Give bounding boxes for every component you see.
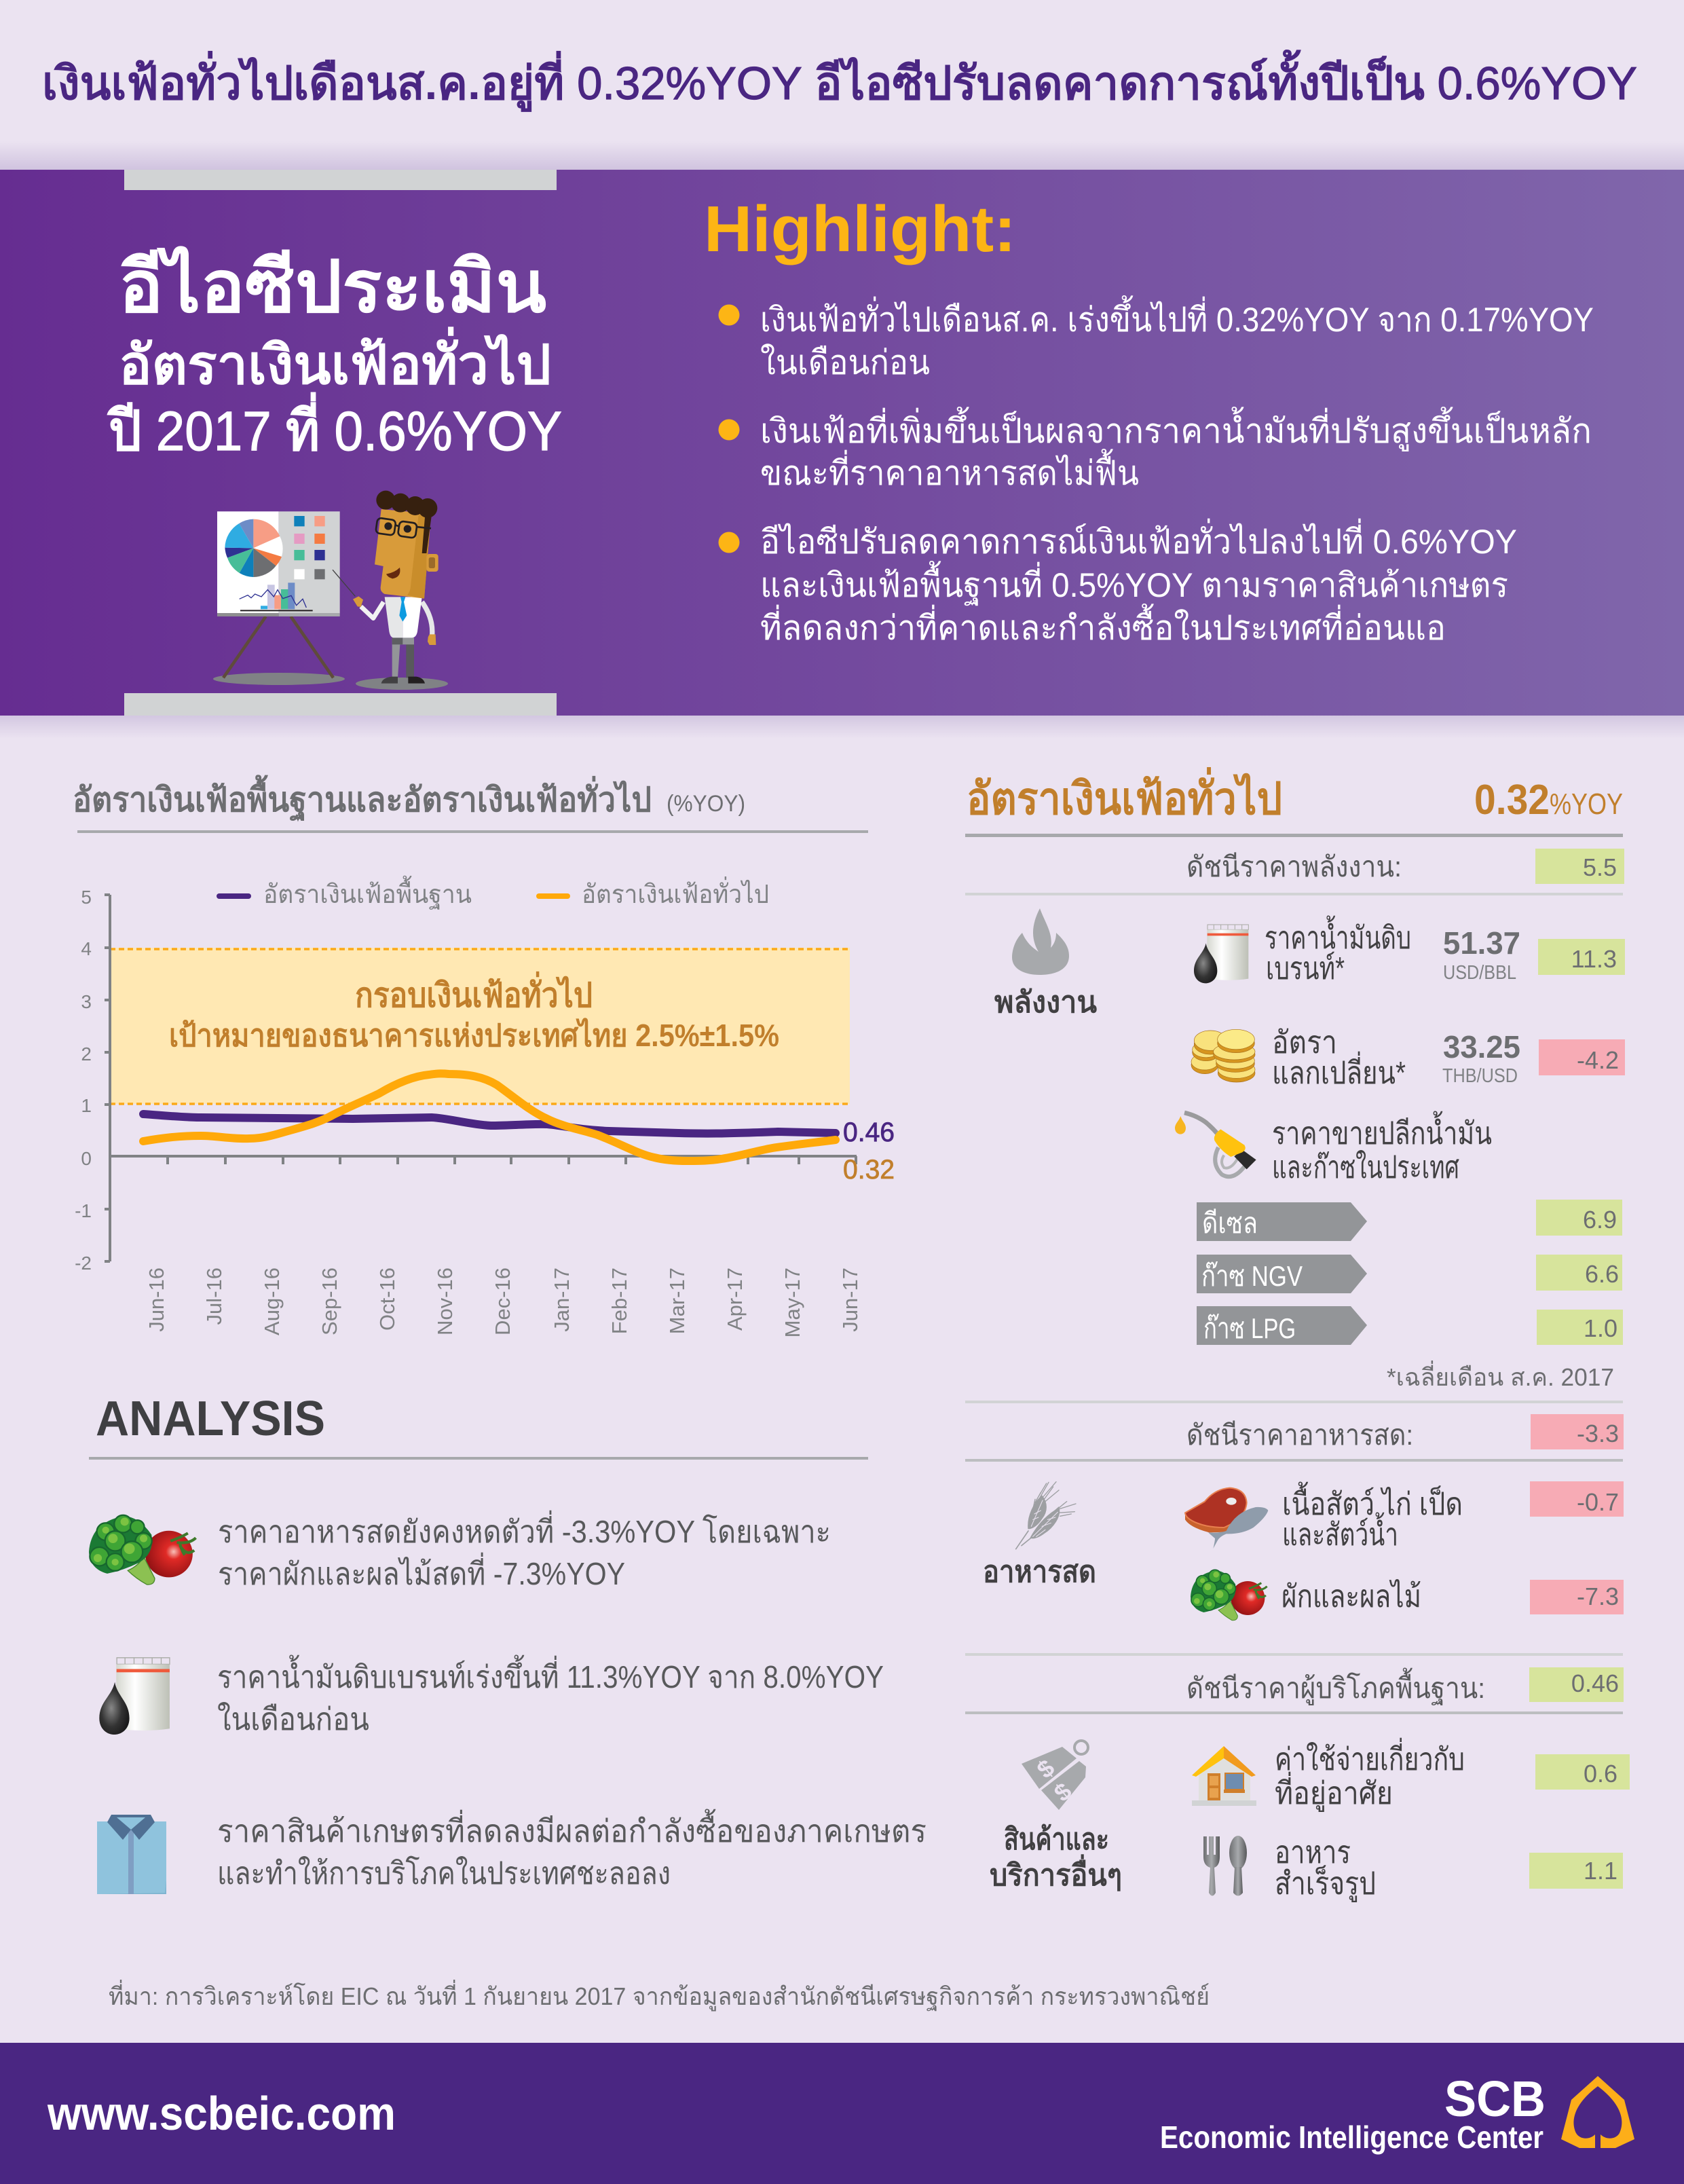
- text: crude oil: ในเดือนก่อน: [217, 1701, 369, 1737]
- x axis labels: Nov-16: [433, 1267, 457, 1335]
- heading: EIC estimate: [107, 246, 562, 462]
- y axis labels: 3: [81, 991, 92, 1012]
- target band: กรอบเงินเฟ้อทั่วไป: [355, 971, 593, 1014]
- diesel row: 6.9: [1583, 1206, 1617, 1234]
- brent row: [1265, 915, 1625, 986]
- brand name: SCB: [1444, 2071, 1546, 2127]
- brand name: Economic Intelligence Center: [1160, 2120, 1543, 2155]
- x axis labels: Jun-16: [145, 1267, 168, 1332]
- fresh food index row: -3.3: [1577, 1420, 1619, 1447]
- exchange rate row: แลกเปลี่ยน*: [1272, 1051, 1406, 1090]
- fresh food index row: [1186, 1414, 1624, 1451]
- highlight item 3: ที่ลดลงกว่าที่คาดและกำลังซื้อในประเทศที่อ่อนแอ: [760, 604, 1446, 647]
- category: fresh food: อาหารสด: [983, 1555, 1096, 1589]
- core inflation line: [143, 1114, 836, 1134]
- core index row: ดัชนีราคาผู้บริโภคพื้นฐาน:: [1186, 1667, 1485, 1705]
- text: agricultural prices: และทำให้การบริโภคในประเทศชะลอลง: [217, 1855, 671, 1891]
- y axis labels: 2: [81, 1043, 92, 1065]
- meat row: [1282, 1481, 1624, 1552]
- exchange rate row: [1272, 1024, 1625, 1090]
- icon: wheat: [1016, 1482, 1076, 1549]
- icon: SCB logo: [1561, 2076, 1634, 2148]
- panel heading: อัตราเงินเฟ้อทั่วไป: [967, 766, 1282, 823]
- highlight item 2: ขณะที่ราคาอาหารสดไม่ฟื้น: [760, 449, 1139, 492]
- category: goods and services: บริการอื่นๆ: [990, 1854, 1122, 1892]
- y axis labels: [75, 887, 92, 1274]
- x axis labels: Jul-16: [202, 1267, 226, 1325]
- icon: price tags: [1022, 1741, 1088, 1810]
- end label core: 0.46: [843, 1117, 895, 1147]
- heading: analysis: [89, 1392, 868, 1460]
- NGV row: [1197, 1255, 1622, 1293]
- energy index row: ดัชนีราคาพลังงาน:: [1186, 851, 1402, 883]
- category: goods and services: สินค้าและ: [1004, 1823, 1109, 1856]
- source note: ที่มา: การวิเคราะห์โดย EIC ณ วันที่ 1 กันยายน 2017 จากข้อมูลของสำนักดัชนีเศรษฐกิจการค้า กระทรวงพาณิชย์: [109, 1980, 1210, 2012]
- legend: อัตราเงินเฟ้อพื้นฐาน: [263, 875, 472, 910]
- highlight item 3: อีไอซีปรับลดคาดการณ์เงินเฟ้อทั่วไปลงไปที่ 0.6%YOY: [760, 519, 1517, 561]
- chart heading: (%YOY): [667, 791, 745, 817]
- prepared food row: สำเร็จรูป: [1275, 1865, 1376, 1902]
- highlight item 3: [718, 519, 1517, 647]
- highlight item 3: และเงินเฟ้อพื้นฐานที่ 0.5%YOY ตามราคาสินค้าเกษตร: [760, 561, 1508, 606]
- icon: oil tank: [99, 1658, 170, 1735]
- meat row: และสัตว์น้ำ: [1282, 1512, 1398, 1552]
- analysis item: fresh food: [89, 1510, 831, 1591]
- vegetables row: -7.3: [1577, 1583, 1619, 1610]
- chart heading: อัตราเงินเฟ้อพื้นฐานและอัตราเงินเฟ้อทั่วไป: [73, 775, 652, 821]
- analysis item: agricultural prices: [97, 1809, 927, 1894]
- core index row: 0.46: [1571, 1669, 1619, 1697]
- x axis labels: Jun-17: [838, 1267, 862, 1332]
- heading: EIC estimate: อีไอซีประเมิน: [119, 246, 546, 327]
- LPG row: 1.0: [1584, 1314, 1617, 1342]
- panel heading: [967, 766, 1623, 823]
- text: fresh food: [218, 1510, 831, 1591]
- LPG row: ก๊าซ LPG: [1203, 1312, 1296, 1344]
- x axis labels: Mar-17: [665, 1267, 689, 1334]
- line chart: core and headline inflation: [75, 875, 895, 1337]
- y axis labels: -2: [75, 1253, 92, 1274]
- text: agricultural prices: [217, 1809, 927, 1891]
- x axis labels: Oct-16: [375, 1267, 399, 1331]
- panel heading: 0.32: [1474, 777, 1550, 823]
- exchange rate row: THB/USD: [1442, 1065, 1518, 1087]
- main title: เงินเฟ้อทั่วไปเดือนส.ค.อยู่ที่ 0.32%YOY อีไอซีปรับลดคาดการณ์ทั้งปีเป็น 0.6%YOY: [42, 49, 1637, 113]
- text: crude oil: ราคาน้ำมันดิบเบรนท์เร่งขึ้นที่ 11.3%YOY จาก 8.0%YOY: [217, 1654, 884, 1695]
- prepared food row: [1275, 1834, 1623, 1902]
- retail fuel heading: [1272, 1111, 1492, 1185]
- y axis labels: 0: [81, 1148, 92, 1169]
- text: crude oil: [217, 1654, 884, 1737]
- highlight item 1: ในเดือนก่อน: [760, 344, 930, 382]
- x axis labels: Feb-17: [607, 1267, 631, 1334]
- exchange rate row: -4.2: [1577, 1046, 1619, 1074]
- panel: purple summary band: [0, 141, 1684, 739]
- analysis item: crude oil: [99, 1654, 884, 1737]
- NGV row: 6.6: [1585, 1260, 1619, 1288]
- panel: headline inflation breakdown: [965, 766, 1630, 1902]
- icon: coins: [1191, 1029, 1255, 1082]
- icon: fuel nozzle: [1175, 1113, 1256, 1177]
- heading: analysis: ANALYSIS: [96, 1392, 325, 1446]
- energy index row: [1186, 849, 1624, 884]
- energy index row: 5.5: [1583, 853, 1617, 881]
- heading: Highlight: Highlight:: [704, 193, 1016, 265]
- icon: shirt: [97, 1815, 166, 1894]
- y axis labels: 4: [81, 938, 92, 959]
- prepared food row: อาหาร: [1275, 1834, 1351, 1870]
- icon: price tags: $: [1049, 1777, 1077, 1807]
- NGV row: ก๊าซ NGV: [1201, 1260, 1303, 1292]
- housing row: ค่าใช้จ่ายเกี่ยวกับ: [1275, 1737, 1465, 1777]
- LPG row: [1197, 1306, 1623, 1345]
- category: energy: พลังงาน: [994, 986, 1097, 1019]
- exchange rate row: 33.25: [1443, 1029, 1520, 1065]
- icon: flame: [1012, 908, 1069, 975]
- x axis labels: Dec-16: [491, 1267, 514, 1335]
- y axis labels: 5: [81, 887, 92, 908]
- x axis labels: [145, 1267, 862, 1337]
- retail fuel heading: และก๊าซในประเทศ: [1272, 1149, 1459, 1185]
- meat row: เนื้อสัตว์ ไก่ เป็ด: [1282, 1481, 1463, 1521]
- category: goods and services: [990, 1823, 1122, 1892]
- housing row: 0.6: [1584, 1760, 1617, 1788]
- icon: vegetables: [89, 1515, 195, 1585]
- x axis labels: Sep-16: [318, 1267, 341, 1335]
- text: fresh food: ราคาอาหารสดยังคงหดตัวที่ -3.3%YOY โดยเฉพาะ: [218, 1510, 831, 1549]
- x axis labels: May-17: [781, 1267, 804, 1337]
- brent row: 51.37: [1443, 925, 1520, 961]
- exchange rate row: อัตรา: [1272, 1024, 1337, 1060]
- heading: EIC estimate: อัตราเงินเฟ้อทั่วไป: [119, 327, 551, 395]
- housing row: [1275, 1737, 1630, 1812]
- brent row: เบรนท์*: [1266, 950, 1345, 986]
- y axis labels: 1: [81, 1095, 92, 1116]
- vegetables row: ผักและผลไม้: [1281, 1578, 1421, 1614]
- target band: [110, 948, 850, 1104]
- footnote: *เฉลี่ยเดือน ส.ค. 2017: [1387, 1361, 1614, 1391]
- fresh food index row: ดัชนีราคาอาหารสด:: [1186, 1419, 1413, 1451]
- icon: fork and spoon: [1203, 1836, 1247, 1895]
- target band: เป้าหมายของธนาคารแห่งประเทศไทย 2.5%±1.5%: [169, 1018, 779, 1053]
- x axis labels: Apr-17: [723, 1267, 747, 1331]
- highlight item 1: [718, 295, 1594, 382]
- icon: vegetables: [1191, 1570, 1267, 1621]
- heading: EIC estimate: ปี 2017 ที่ 0.6%YOY: [107, 392, 562, 462]
- text: agricultural prices: ราคาสินค้าเกษตรที่ลดลงมีผลต่อกำลังซื้อของภาคเกษตร: [217, 1809, 927, 1849]
- core index row: [1186, 1667, 1624, 1705]
- prepared food row: 1.1: [1584, 1857, 1617, 1885]
- highlight item 2: เงินเฟ้อที่เพิ่มขึ้นเป็นผลจากราคาน้ำมันที่ปรับสูงขึ้นเป็นหลัก: [760, 407, 1592, 451]
- brand name: [1160, 2071, 1546, 2155]
- website: www.scbeic.com: [47, 2087, 396, 2140]
- headline inflation line: [143, 1073, 836, 1161]
- vegetables row: [1281, 1578, 1624, 1614]
- panel: footer: [0, 2043, 1684, 2184]
- end label headline: 0.32: [843, 1155, 895, 1185]
- legend: อัตราเงินเฟ้อทั่วไป: [582, 876, 769, 909]
- diesel row: [1197, 1200, 1622, 1241]
- brent row: USD/BBL: [1443, 962, 1516, 984]
- retail fuel heading: ราคาขายปลีกน้ำมัน: [1272, 1111, 1492, 1151]
- icon: meat and fish: [1185, 1488, 1268, 1549]
- icon: presenter with chart board: [213, 491, 448, 690]
- meat row: -0.7: [1577, 1488, 1619, 1516]
- legend: [217, 875, 769, 910]
- diesel row: ดีเซล: [1202, 1207, 1258, 1239]
- x axis labels: Jan-17: [550, 1267, 574, 1332]
- icon: price tags: $: [1031, 1754, 1060, 1784]
- y axis labels: -1: [75, 1200, 92, 1221]
- icon: house: [1192, 1746, 1256, 1806]
- x axis labels: Aug-16: [260, 1267, 284, 1335]
- icon: oil tank: [1194, 925, 1248, 983]
- brent row: ราคาน้ำมันดิบ: [1265, 915, 1411, 955]
- panel heading: %YOY: [1550, 788, 1623, 821]
- chart heading: [73, 775, 868, 833]
- housing row: ที่อยู่อาศัย: [1275, 1771, 1393, 1812]
- highlight item 1: เงินเฟ้อทั่วไปเดือนส.ค. เร่งขึ้นไปที่ 0.32%YOY จาก 0.17%YOY: [760, 295, 1594, 339]
- text: fresh food: ราคาผักและผลไม้สดที่ -7.3%YOY: [218, 1552, 625, 1591]
- brent row: 11.3: [1571, 945, 1617, 973]
- highlight item 2: [718, 407, 1592, 492]
